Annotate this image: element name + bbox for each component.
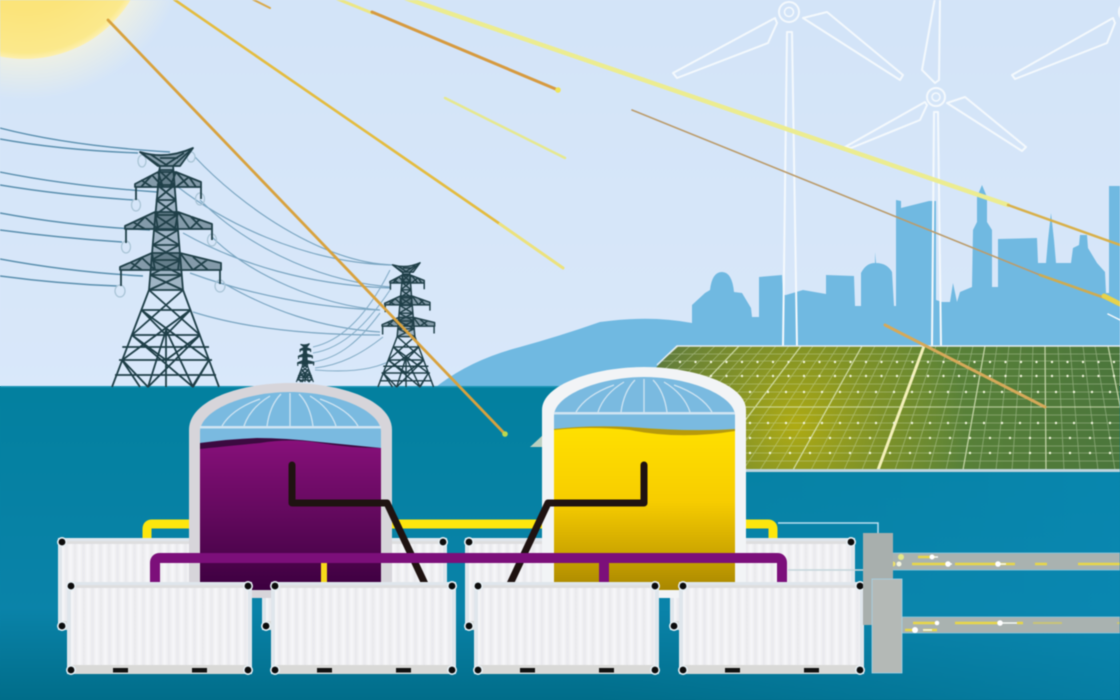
black electrode pipe left [292, 465, 425, 584]
sun [0, 0, 190, 100]
purple electrolyte tank [189, 383, 392, 598]
ray spark [555, 87, 561, 93]
medium transmission pylon [378, 263, 435, 387]
power lines [0, 128, 392, 371]
ray: pale short [445, 98, 565, 158]
ray: over solar panels [885, 325, 1045, 407]
solar rays [108, 0, 1120, 437]
insulator rings [115, 152, 225, 297]
ray end spark [502, 431, 508, 437]
ray: yellow fading tip [500, 224, 563, 268]
thin connector: light blue [778, 523, 878, 534]
black electrode pipe right [510, 465, 644, 584]
ray: orange to tank [108, 20, 505, 434]
ray: thin continuation [1040, 275, 1108, 299]
purple electrolyte pipe [155, 558, 782, 584]
wind turbine 2 [845, 0, 1026, 347]
yellow electrolyte tank [542, 367, 746, 598]
wind turbine 1 [673, 2, 903, 347]
inverter box front [872, 579, 902, 673]
ray: short top [250, 0, 270, 8]
city skyline and hill [436, 185, 1120, 390]
ray: white tip [1108, 314, 1120, 320]
ray: long orange continuation [1008, 205, 1120, 245]
back row containers [57, 537, 856, 631]
ray: yellow long [172, 0, 500, 224]
cell dots [680, 362, 1120, 376]
small distant pylon [296, 344, 314, 382]
large transmission pylon [112, 148, 221, 387]
yellow stub in purple tank [321, 563, 327, 583]
ground [0, 386, 1120, 700]
grid output bar upper [890, 553, 1120, 570]
ray: orange streak [372, 12, 558, 90]
ray: pale start [335, 0, 372, 13]
inverter box rear [863, 533, 893, 625]
panel dividers [669, 346, 1120, 470]
ray: thin brown [632, 110, 1040, 275]
ray: right tip [1104, 296, 1120, 304]
wind turbine 3 [1012, 2, 1120, 79]
ray: long pale yellow [405, 0, 1008, 205]
fine cell grid [662, 346, 1120, 470]
yellow electrolyte pipe [147, 524, 773, 545]
solar panel array [530, 346, 1120, 472]
thin connector: grey [788, 570, 885, 581]
grid output bar lower [900, 617, 1120, 633]
front row containers [66, 581, 865, 675]
sky background [0, 0, 1120, 390]
